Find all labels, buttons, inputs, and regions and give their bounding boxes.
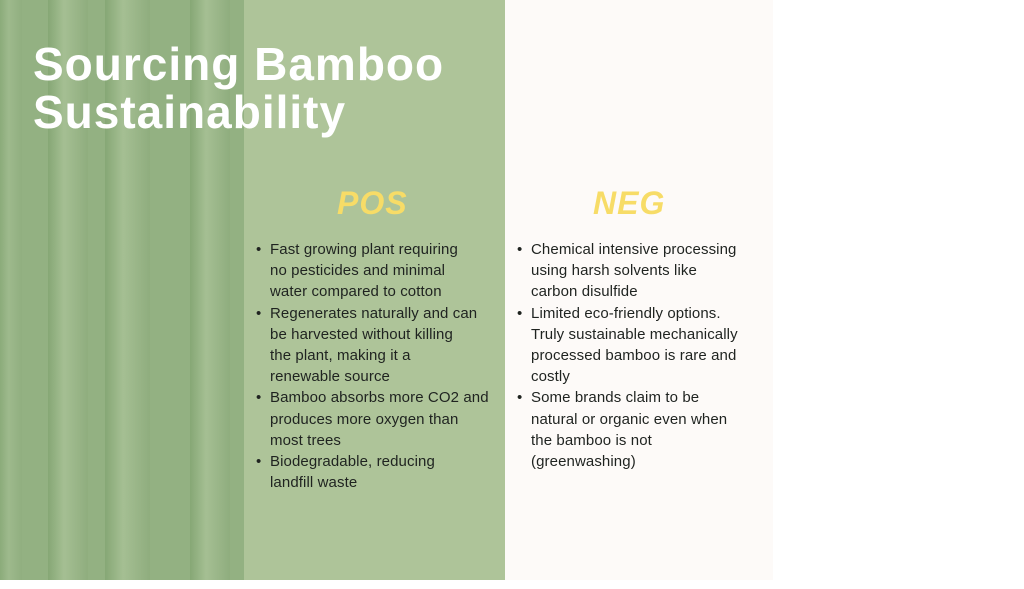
list: pros: most trees	[270, 432, 341, 449]
list: pros: Bamboo absorbs more CO2 and	[270, 389, 489, 406]
list: pros: be harvested without killing	[270, 326, 453, 343]
title: Sourcing Bamboo	[33, 38, 444, 90]
list: cons: (greenwashing)	[531, 453, 636, 470]
list: cons: Limited eco-friendly options.	[531, 305, 721, 322]
title: Sustainability	[33, 86, 346, 138]
heading: POS: POS	[337, 185, 408, 221]
list: pros	[256, 241, 489, 491]
list: pros: renewable source	[270, 368, 390, 385]
list: cons	[518, 241, 738, 470]
list: cons: processed bamboo is rare and	[531, 347, 736, 364]
list: cons: costly	[531, 368, 570, 385]
list: pros: landfill waste	[270, 474, 357, 491]
list: cons: Some brands claim to be	[531, 389, 699, 406]
list: pros: Biodegradable, reducing	[270, 453, 435, 470]
panel: cons	[505, 0, 773, 580]
list: cons: Chemical intensive processing	[531, 241, 736, 258]
list: pros: water compared to cotton	[270, 283, 442, 300]
list: cons: the bamboo is not	[531, 432, 652, 449]
list: pros: the plant, making it a	[270, 347, 411, 364]
heading: NEG: NEG	[593, 185, 665, 221]
title	[33, 38, 444, 138]
list: cons: Truly sustainable mechanically	[531, 326, 738, 343]
list: pros: Fast growing plant requiring	[270, 241, 458, 258]
list: cons: natural or organic even when	[531, 411, 727, 428]
list: pros: produces more oxygen than	[270, 411, 458, 428]
list: pros: no pesticides and minimal	[270, 262, 445, 279]
list: cons: using harsh solvents like	[531, 262, 697, 279]
panel: pros	[244, 0, 505, 580]
background photo: bamboo	[0, 0, 244, 580]
list: cons: carbon disulfide	[531, 283, 638, 300]
list: pros: Regenerates naturally and can	[270, 305, 477, 322]
